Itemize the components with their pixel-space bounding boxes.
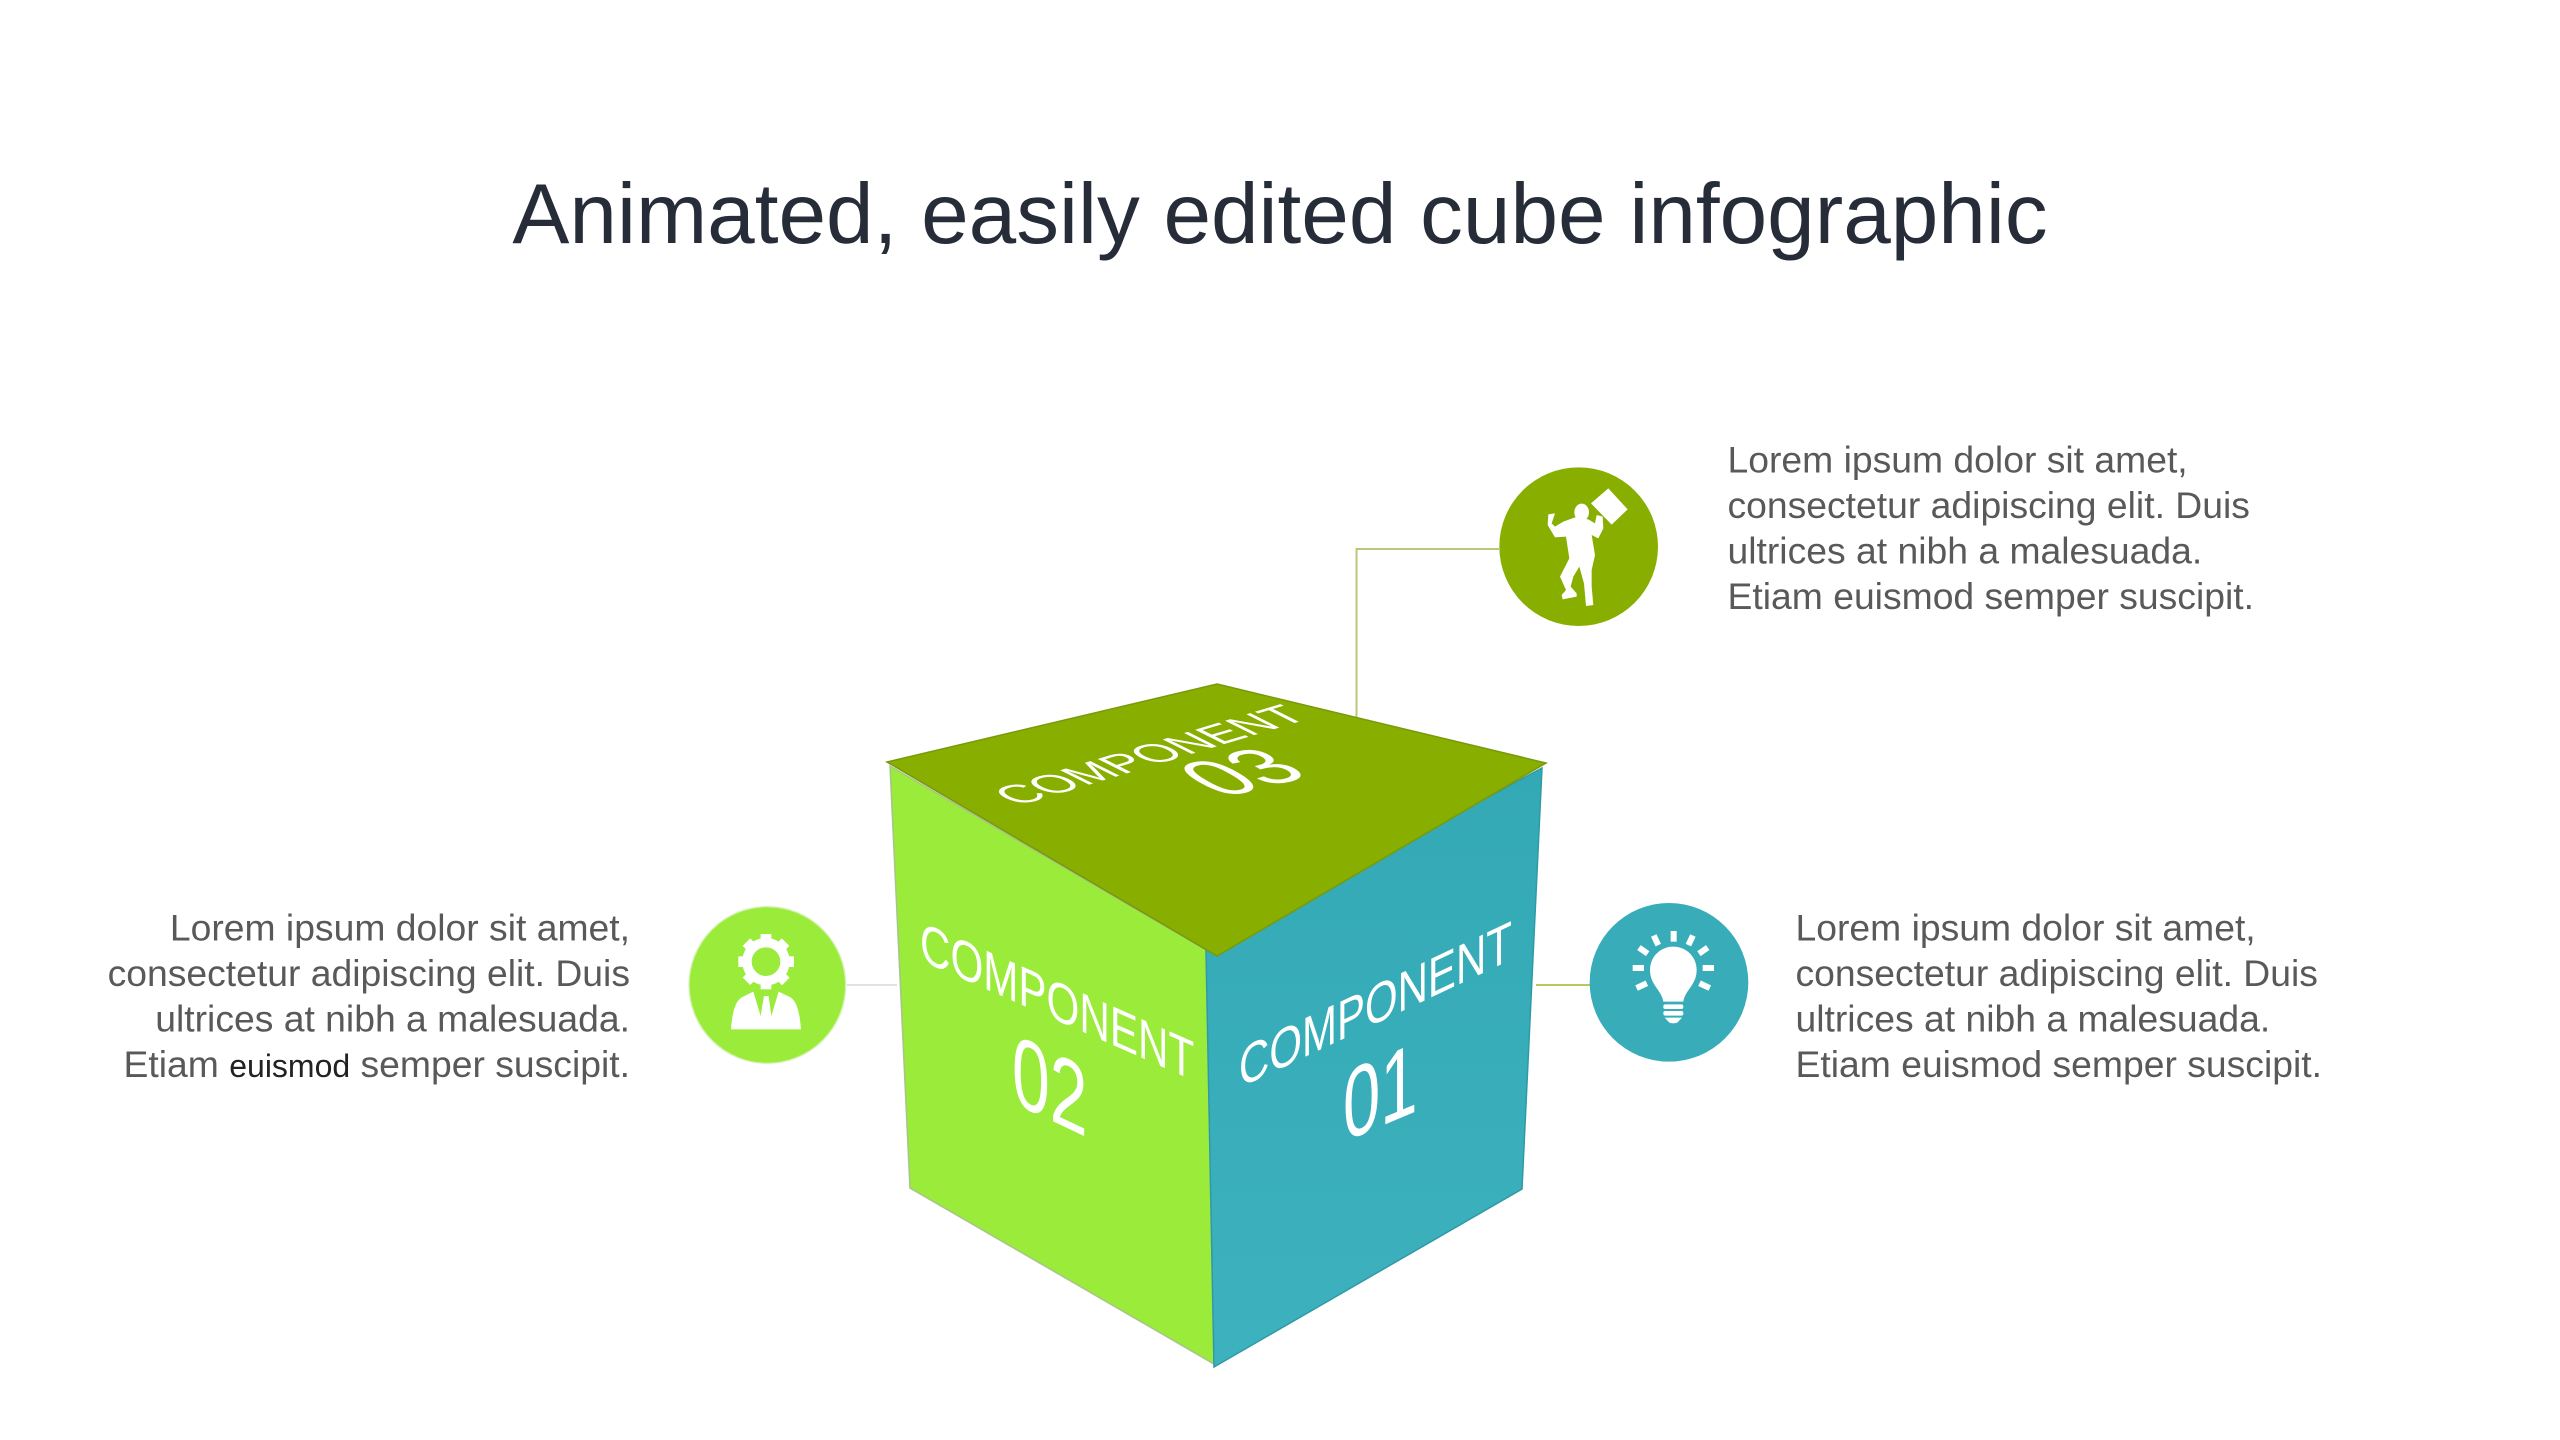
text block: left: ultrices at nibh a malesuada. — [155, 998, 630, 1040]
text block: top right: ultrices at nibh a malesuada. — [1728, 530, 2202, 572]
cube face: component 01: 01 — [1343, 1020, 1418, 1164]
text block: top right — [1728, 438, 2254, 617]
text block: lower right: Etiam euismod semper suscipit. — [1796, 1043, 2322, 1085]
cube face: component 03: 03 — [1155, 737, 1328, 807]
icon: top circle, jumping businessman — [1499, 467, 1658, 626]
connector: top circle to cube — [1356, 549, 1499, 720]
text block: lower right: Lorem ipsum dolor sit amet, — [1796, 906, 2256, 948]
text block: lower right: consectetur adipiscing elit. Duis — [1796, 952, 2318, 994]
cube — [887, 684, 1546, 1367]
cube face: component 03 — [887, 684, 1546, 956]
text block: lower right — [1796, 906, 2322, 1085]
cube face: component 02: 02 — [1012, 1012, 1088, 1159]
text block: left: Lorem ipsum dolor sit amet, — [170, 906, 630, 948]
cube face: component 02 — [890, 766, 1214, 1364]
text block: left: consectetur adipiscing elit. Duis — [108, 952, 630, 994]
text block: top right: Lorem ipsum dolor sit amet, — [1728, 438, 2188, 480]
connector: left circle to cube — [847, 984, 897, 986]
icon: right circle, light bulb — [1590, 903, 1748, 1062]
text block: top right: Etiam euismod semper suscipit. — [1728, 575, 2254, 617]
title: Animated, easily edited cube infographic — [512, 167, 2048, 262]
cube face: component 01 — [1206, 768, 1542, 1367]
cube face: component 02: COMPONENT — [920, 910, 1194, 1093]
text block: left: Etiam euismod semper suscipit. — [124, 1043, 630, 1085]
text block: left — [108, 906, 630, 1085]
connector: right circle to cube — [1536, 984, 1591, 986]
cube face: component 01: COMPONENT — [1239, 908, 1512, 1100]
icon: left circle, gear-head person — [689, 907, 846, 1063]
text block: top right: consectetur adipiscing elit. Duis — [1728, 484, 2250, 526]
text block: lower right: ultrices at nibh a malesuada. — [1796, 998, 2270, 1040]
cube face: component 03: COMPONENT — [980, 699, 1319, 810]
